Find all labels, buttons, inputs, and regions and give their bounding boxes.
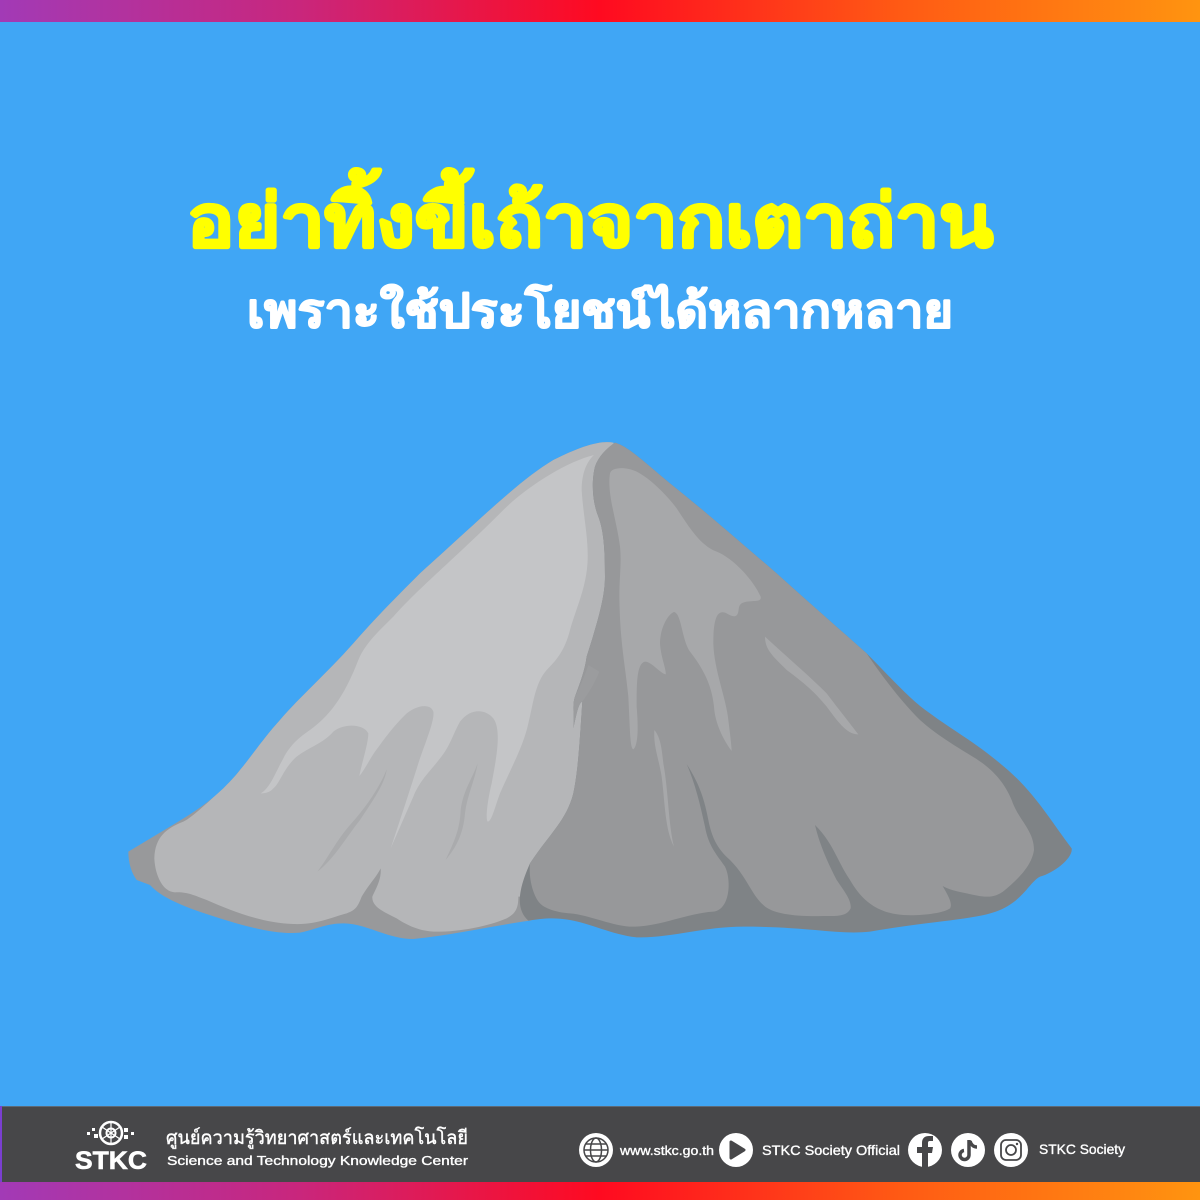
bottom gradient bar [0,1182,1200,1200]
STKC logo [75,1122,147,1175]
channel name: STKC Society Official [762,1142,900,1158]
icon: instagram [994,1133,1028,1167]
icon: facebook [908,1133,942,1167]
icon: globe [579,1133,613,1167]
top gradient bar [0,0,1200,22]
illustration: ash pile [128,442,1072,939]
organisation name Thai: ศูนย์ความรู้วิทยาศาสตร์และเทคโนโลยี [166,1126,468,1149]
social handle: STKC Society [1039,1141,1125,1157]
title: อย่าทิ้งขี้เถ้าจากเตาถ่าน [187,168,993,262]
pile right side [520,443,1072,937]
website: www.stkc.go.th [619,1143,714,1158]
footer band [0,1106,1200,1200]
subtitle: เพราะใช้ประโยชน์ได้หลากหลาย [247,283,953,337]
icon: play [719,1133,753,1167]
pile left side [128,442,620,939]
logo wordmark: STKC [75,1147,147,1175]
logo emblem [100,1122,122,1144]
icon: tiktok [951,1133,985,1167]
organisation name English: Science and Technology Knowledge Center [167,1153,469,1168]
